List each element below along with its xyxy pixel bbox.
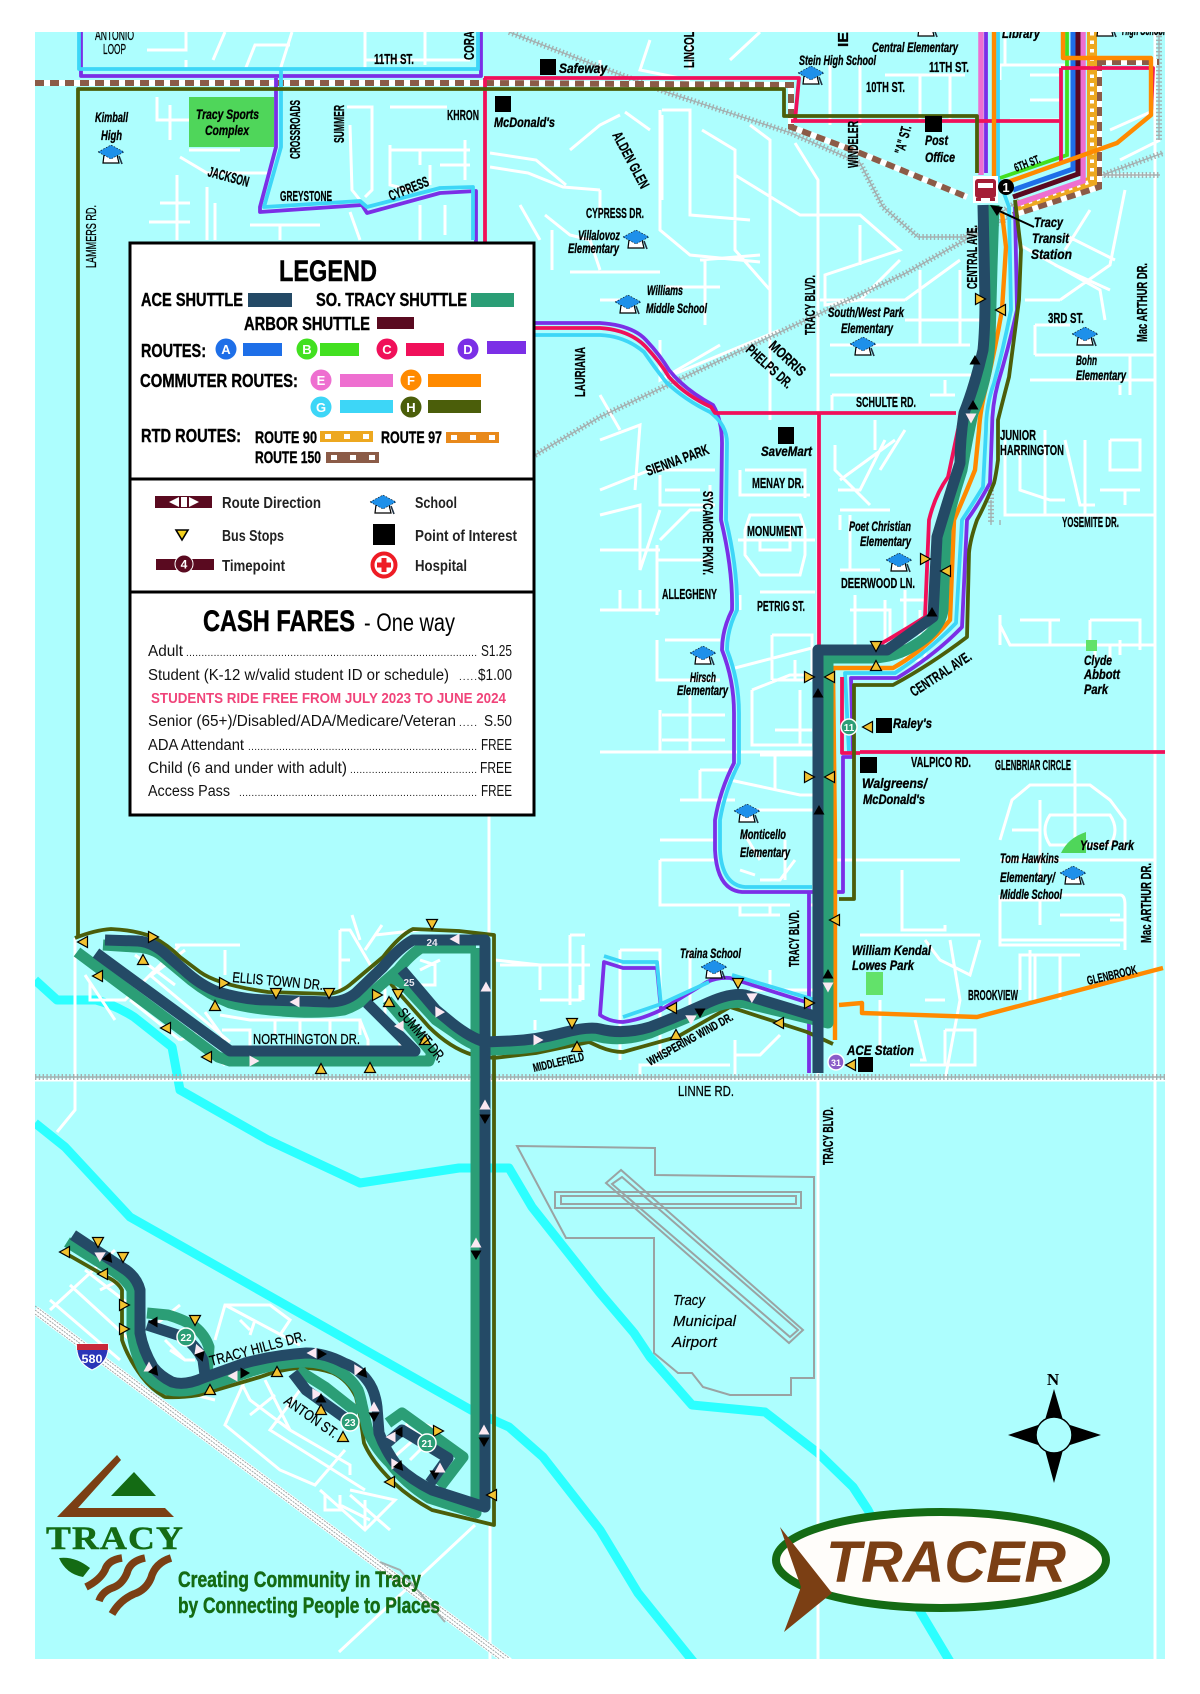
street and place labels: KHRON bbox=[447, 108, 479, 124]
street and place labels: DEERWOOD LN. bbox=[841, 576, 915, 592]
street and place labels: 11TH ST. bbox=[374, 52, 414, 68]
street and place labels: HARRINGTON bbox=[1000, 443, 1064, 459]
RTD routes key bbox=[141, 426, 499, 467]
street and place labels: Park bbox=[1084, 681, 1109, 697]
street and place labels: MENAY DR. bbox=[752, 476, 804, 492]
street and place labels: TRACY BLVD. bbox=[787, 910, 803, 967]
street and place labels: LAURIANA bbox=[573, 347, 589, 397]
park: William Kendal Lowes Park bbox=[866, 972, 883, 995]
street and place labels: 11TH ST. bbox=[929, 60, 969, 76]
cash fares table: ADA Attendant bbox=[148, 737, 245, 754]
street and place labels: CORAL bbox=[462, 25, 478, 60]
street and place labels: YOSEMITE DR. bbox=[1062, 515, 1119, 531]
street and place labels: 3RD ST. bbox=[1048, 311, 1084, 327]
street and place labels: BROOKVIEW bbox=[968, 988, 1018, 1004]
street and place labels: CYPRESS DR. bbox=[586, 206, 644, 222]
routes key: ROUTES: bbox=[141, 341, 206, 361]
street and place labels: "A" ST. bbox=[892, 124, 915, 156]
direction arrows on routes bbox=[94, 355, 980, 1480]
cash fares table: Senior (65+)/Disabled/ADA/Medicare/Veteran bbox=[148, 713, 456, 730]
street and place labels: Elementary bbox=[1076, 367, 1127, 383]
tagline: Creating Community in Tracy bbox=[178, 1567, 422, 1592]
commuter routes key: COMMUTER ROUTES: bbox=[140, 371, 298, 391]
street and place labels: Bohn bbox=[1076, 352, 1097, 368]
symbol key bbox=[155, 495, 517, 576]
street and place labels: WHISPERING WIND DR. bbox=[645, 1010, 735, 1069]
tagline bbox=[178, 1567, 440, 1618]
street and place labels: Library bbox=[1002, 25, 1041, 41]
commuter routes key: H bbox=[406, 400, 416, 415]
street and place labels: GLENBROOK bbox=[1086, 963, 1138, 988]
cash fares heading: - One way bbox=[364, 609, 455, 637]
street and place labels: South/West Park bbox=[828, 304, 905, 320]
commuter routes key: F bbox=[407, 373, 415, 388]
cash fares table: FREE bbox=[481, 737, 512, 754]
routes key: A bbox=[221, 342, 231, 357]
Tracy city logo: TRACY bbox=[46, 1521, 184, 1557]
street and place labels: SUMMIT DR. bbox=[394, 1005, 449, 1066]
street and place labels: ELLIS TOWN DR. bbox=[232, 970, 324, 994]
routes key: B bbox=[302, 342, 312, 357]
street and place labels: ALLEGHENY bbox=[662, 587, 717, 603]
park: Yusef Park bbox=[1061, 832, 1086, 853]
street and place labels: Safeway bbox=[559, 60, 608, 76]
route A blue bbox=[1013, 32, 1073, 190]
street and place labels: MORRIS bbox=[765, 338, 809, 380]
routes key: C bbox=[382, 342, 392, 357]
street and place labels: Poet Christian bbox=[849, 518, 911, 534]
street and place labels: Williams bbox=[647, 282, 683, 298]
timepoint markers bbox=[177, 719, 857, 1452]
route B green bbox=[1000, 32, 1067, 178]
street and place labels: MIDDLEFIELD bbox=[532, 1050, 586, 1075]
street and place labels: Hirsch bbox=[690, 669, 716, 685]
street and place labels: Middle School bbox=[646, 300, 708, 316]
street and place labels: Transit bbox=[1032, 230, 1070, 246]
street and place labels: McDonald's bbox=[863, 791, 925, 807]
street and place labels: CENTRAL AVE. bbox=[965, 225, 981, 289]
street and place labels: Yusef Park bbox=[1080, 837, 1135, 853]
cash fares table: Adult bbox=[148, 643, 184, 660]
cash fares table bbox=[148, 643, 512, 800]
street and place labels: SYCAMORE PKWY. bbox=[699, 491, 715, 575]
cash fares table: ............................................................................................... bbox=[186, 648, 477, 659]
street and place labels: CENTRAL AVE. bbox=[907, 649, 975, 700]
street and place labels: SaveMart bbox=[761, 443, 813, 459]
legend title: LEGEND bbox=[279, 255, 377, 288]
street and place labels: McDonald's bbox=[494, 114, 555, 130]
routes key bbox=[141, 338, 526, 361]
route 150 dashed line bbox=[35, 62, 1159, 215]
commuter routes key: E bbox=[317, 373, 326, 388]
street and place labels: SCHULTE RD. bbox=[856, 395, 916, 411]
street and place labels: Municipal bbox=[673, 1313, 737, 1330]
street and place labels: Post bbox=[925, 132, 949, 148]
street and place labels: Elementary bbox=[568, 240, 620, 256]
icon: Tracy Transit Station bbox=[973, 176, 1014, 203]
shuttle keys: ACE SHUTTLE bbox=[141, 290, 243, 310]
timepoint markers: 25 bbox=[403, 978, 415, 989]
street and place labels: PHELPS DR. bbox=[742, 342, 795, 392]
street and place labels: Complex bbox=[205, 122, 250, 138]
street and place labels: Central Elementary bbox=[872, 39, 959, 55]
cash fares table: FREE bbox=[480, 760, 512, 777]
street and place labels: LINCOLN bbox=[682, 24, 698, 68]
shuttle keys: SO. TRACY SHUTTLE bbox=[316, 290, 467, 310]
street and place labels: Mac ARTHUR DR. bbox=[1139, 863, 1155, 943]
street and place labels: ANTONIO bbox=[95, 28, 134, 44]
street and place labels: SIENNA PARK bbox=[644, 442, 712, 480]
route E pink bbox=[981, 32, 1083, 204]
timepoint markers: 23 bbox=[344, 1418, 356, 1429]
airport boundary and runways bbox=[517, 1146, 814, 1395]
bus stops bbox=[60, 294, 1006, 1500]
street and place labels: Office bbox=[925, 149, 955, 165]
railroad tracks bbox=[35, 32, 1165, 1077]
street and place labels: LAMMERS RD. bbox=[84, 205, 100, 268]
icon: I-580 shield bbox=[77, 1344, 108, 1370]
symbol key: School bbox=[415, 495, 457, 512]
street and place labels: ANTON ST. bbox=[281, 1393, 341, 1442]
timepoint markers: 21 bbox=[421, 1439, 433, 1450]
street and place labels: Abbott bbox=[1083, 666, 1121, 682]
river canals bbox=[35, 980, 952, 1665]
street and place labels: Lowes Park bbox=[852, 957, 915, 973]
street and place labels: Monticello bbox=[740, 826, 786, 842]
street and place labels: Elementary/ bbox=[1000, 869, 1056, 885]
timepoint markers: 31 bbox=[831, 1058, 841, 1068]
shuttle keys bbox=[141, 290, 514, 334]
street and place labels: Elementary bbox=[677, 682, 729, 698]
symbol key: Hospital bbox=[415, 558, 467, 575]
route 90 and 97 dotted lines bbox=[1017, 32, 1092, 206]
street and place labels: William Kendal bbox=[852, 942, 932, 958]
symbol key: 4 bbox=[181, 558, 188, 572]
street and place labels: CROSSROADS bbox=[288, 100, 304, 159]
cash fares table: $1.00 bbox=[478, 667, 512, 684]
street and place labels: Tracy bbox=[673, 1292, 706, 1309]
RTD routes key: ROUTE 150 bbox=[255, 448, 321, 467]
icon: I-580 shield: 580 bbox=[82, 1352, 103, 1366]
cash fares table: FREE bbox=[481, 783, 512, 800]
street and place labels: Clyde bbox=[1084, 652, 1112, 668]
street and place labels: GREYSTONE bbox=[280, 189, 332, 205]
cash fares table: .......................................................................... bbox=[248, 742, 477, 753]
street and place labels: TRACY BLVD. bbox=[821, 1107, 837, 1165]
street and place labels: MONUMENT bbox=[747, 524, 803, 540]
tagline: by Connecting People to Places bbox=[178, 1593, 440, 1618]
street and place labels: Mac ARTHUR DR. bbox=[1135, 263, 1151, 342]
street and place labels: 10TH ST. bbox=[866, 80, 905, 96]
cash fares table: Child (6 and under with adult) bbox=[148, 760, 347, 777]
commuter routes key bbox=[140, 370, 481, 418]
arbor shuttle maroon bbox=[1013, 32, 1078, 197]
street and place labels: JACKSON bbox=[206, 164, 251, 191]
street and place labels: Stein High School bbox=[799, 52, 877, 68]
street and place labels: SUMMER bbox=[332, 105, 348, 143]
street and place labels: Walgreens/ bbox=[862, 775, 929, 791]
street and place labels: High bbox=[101, 127, 122, 143]
street and place labels: GLENBRIAR CIRCLE bbox=[995, 758, 1071, 774]
street and place labels: TRACY BLVD. bbox=[803, 275, 819, 335]
street and place labels: ACE Station bbox=[846, 1042, 914, 1058]
route G light blue bbox=[79, 32, 1011, 1017]
cash fares table: ..... bbox=[459, 718, 477, 729]
compass rose bbox=[1008, 1370, 1101, 1483]
street and place labels: 6TH ST. bbox=[1012, 152, 1042, 175]
route D purple bbox=[81, 32, 1017, 1073]
street and place labels: PETRIG ST. bbox=[757, 599, 805, 615]
cash fares table: ..... bbox=[459, 672, 477, 683]
street and place labels: WINDELER bbox=[846, 121, 862, 168]
street and place labels: Raley's bbox=[893, 715, 932, 731]
street and place labels: Elementary bbox=[740, 844, 791, 860]
points of interest bbox=[495, 59, 942, 1072]
street and place labels: Tracy Sports bbox=[196, 106, 259, 122]
street and place labels: Station bbox=[1031, 246, 1072, 262]
RTD routes key: ROUTE 97 bbox=[381, 428, 442, 447]
freeway I-580 bbox=[35, 1306, 509, 1666]
cash fares table: S1.25 bbox=[481, 643, 512, 660]
street and place labels: JUNIOR bbox=[1000, 428, 1036, 444]
route F orange bbox=[833, 32, 1163, 1040]
routes key: D bbox=[463, 342, 473, 357]
timepoint markers: 24 bbox=[426, 938, 438, 949]
cash fares table: STUDENTS RIDE FREE FROM JULY 2023 TO JUNE 2024 bbox=[151, 690, 507, 707]
street and place labels: VALPICO RD. bbox=[911, 755, 971, 771]
park: Clyde Abbott Park bbox=[1086, 640, 1097, 651]
shuttle keys: ARBOR SHUTTLE bbox=[244, 314, 370, 334]
cash fares heading: CASH FARES bbox=[203, 605, 355, 638]
street and place labels: CYPRESS bbox=[387, 174, 432, 205]
TRACER logo: TRACER bbox=[826, 1530, 1066, 1595]
Tracy city logo bbox=[46, 1455, 184, 1614]
street and place labels: Villalovoz bbox=[578, 227, 620, 243]
cash fares table: S.50 bbox=[484, 713, 512, 730]
street and place labels: Airport bbox=[671, 1334, 718, 1351]
symbol key: Timepoint bbox=[222, 558, 285, 575]
compass rose: N bbox=[1047, 1370, 1060, 1389]
cash fares table: ............................................................................. bbox=[239, 788, 477, 799]
street and place labels: Elementary bbox=[860, 533, 912, 549]
ace shuttle navy bbox=[73, 205, 985, 1507]
street and place labels bbox=[84, 22, 1166, 1442]
street and place labels: TRACY HILLS DR. bbox=[208, 1329, 308, 1370]
street and place labels: Elementary bbox=[841, 320, 894, 336]
street and place labels: LOOP bbox=[103, 42, 126, 58]
RTD routes key: ROUTE 90 bbox=[255, 428, 317, 447]
RTD routes key: RTD ROUTES: bbox=[141, 426, 241, 446]
street and place labels: IE bbox=[836, 32, 852, 47]
cash fares table: Access Pass bbox=[148, 783, 230, 800]
street and place labels: LINNE RD. bbox=[678, 1084, 734, 1100]
timepoint markers: 22 bbox=[180, 1333, 192, 1344]
south tracy shuttle teal bbox=[67, 205, 994, 1513]
cash fares table: ......................................... bbox=[350, 765, 477, 776]
TRACER logo bbox=[776, 1512, 1106, 1632]
street and place labels: Tracy bbox=[1034, 214, 1064, 230]
symbol key: Route Direction bbox=[222, 495, 321, 512]
street and place labels: Tom Hawkins bbox=[1000, 850, 1059, 866]
timepoint markers: 11 bbox=[844, 723, 855, 734]
street and place labels: Middle School bbox=[1000, 886, 1063, 902]
symbol key: Bus Stops bbox=[222, 528, 284, 545]
icon: Tracy Transit Station: 1 bbox=[1002, 180, 1010, 195]
symbol key: Point of Interest bbox=[415, 528, 517, 545]
arrow: to transit station bbox=[990, 205, 1034, 227]
school icons bbox=[98, 18, 1118, 979]
street and place labels: ALDEN GLEN bbox=[608, 129, 652, 192]
street and place labels: Traina School bbox=[680, 945, 742, 961]
street and place labels: NORTHINGTON DR. bbox=[253, 1032, 360, 1048]
route C red bbox=[484, 68, 1165, 753]
cash fares table: Student (K-12 w/valid student ID or schedule) bbox=[148, 667, 449, 684]
route H olive bbox=[65, 89, 1021, 1525]
park: Tracy Sports Complex bbox=[189, 97, 274, 147]
street and place labels: Kimball bbox=[95, 109, 129, 125]
commuter routes key: G bbox=[316, 400, 326, 415]
legend panel bbox=[130, 243, 534, 815]
